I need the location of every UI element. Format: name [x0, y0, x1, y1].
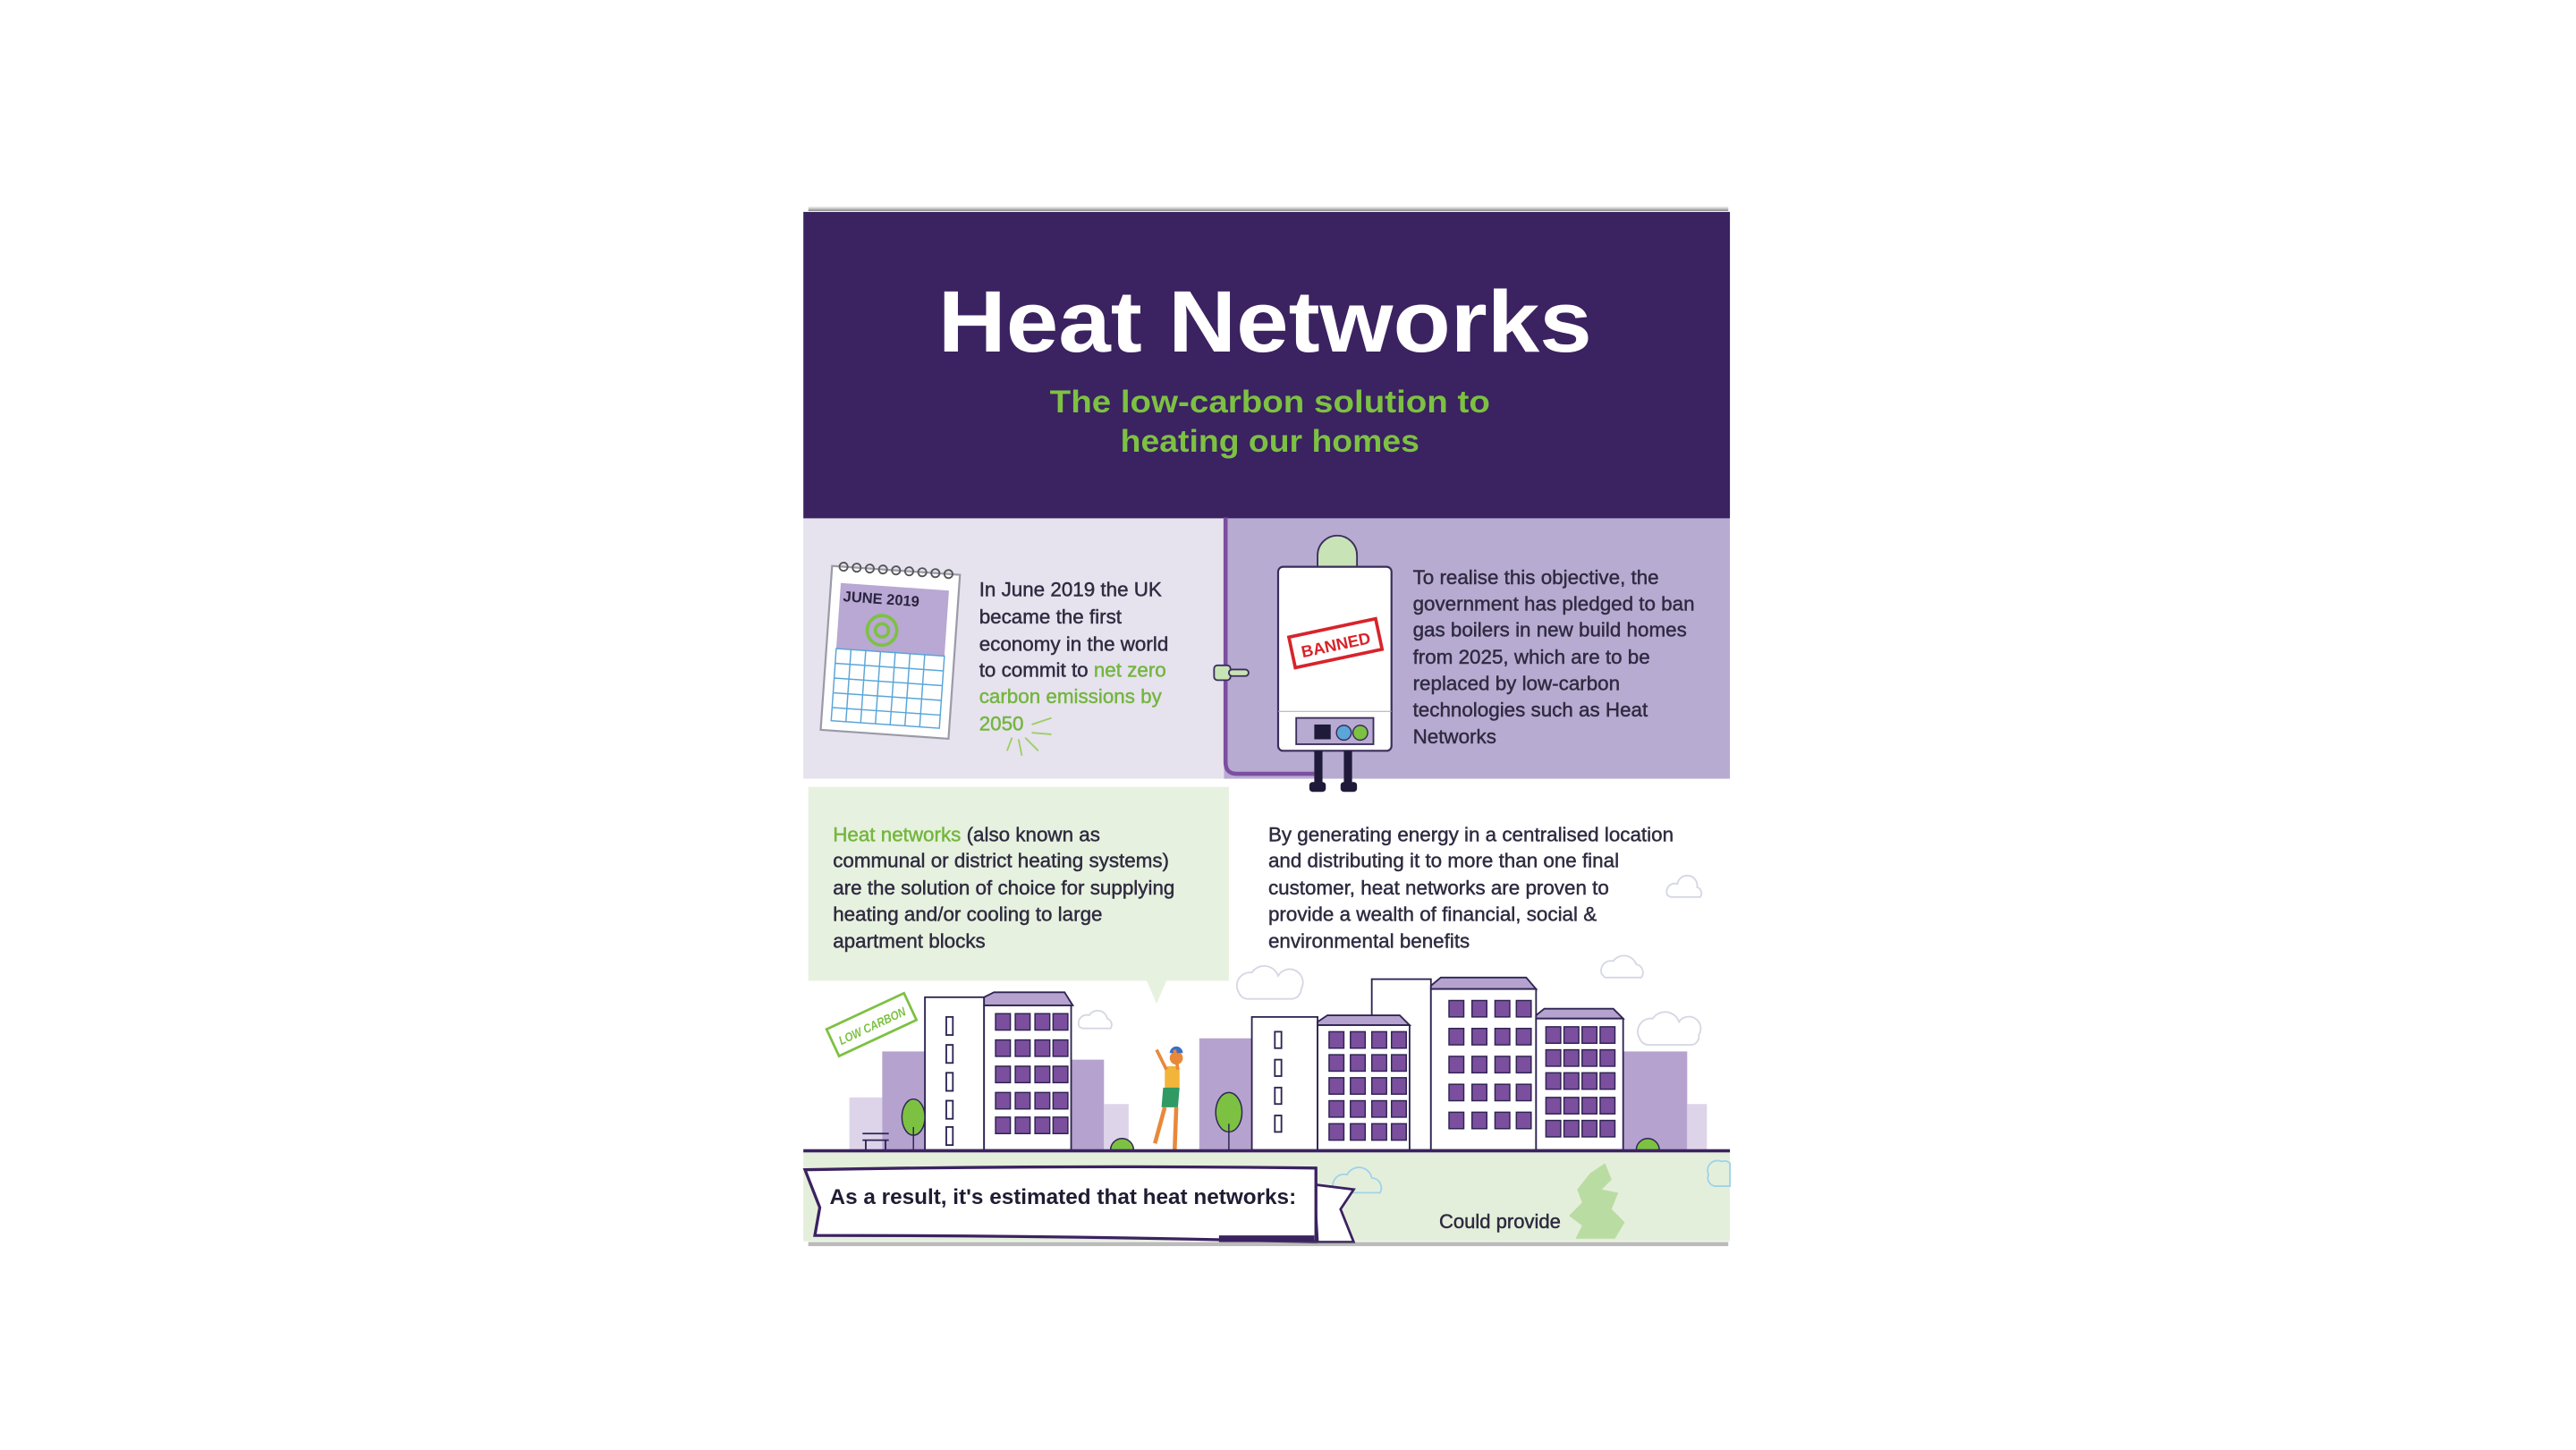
text: net zero: to commit to net zero: [979, 659, 1166, 682]
speech box: heat networks: heating and/or cooling to large: [833, 903, 1102, 925]
ground line: [803, 1149, 1730, 1152]
stamp: low carbon: [826, 993, 917, 1056]
text: boiler ban: government has pledged to ban: [1413, 592, 1695, 615]
subtitle: The low-carbon solution to: [1050, 385, 1490, 420]
text: net zero: 2050: [979, 712, 1024, 734]
banner: As a result, it's estimated that heat networks:: [830, 1185, 1296, 1209]
building: right group: [1252, 978, 1623, 1150]
text: net zero: carbon emissions by: [979, 685, 1163, 708]
panel: net zero commitment: [803, 518, 1224, 779]
icon: boiler: [1278, 536, 1392, 792]
bench: [862, 1133, 889, 1150]
text: boiler ban: [1413, 566, 1695, 748]
pipe: [1225, 518, 1314, 774]
icon: plug: [1214, 666, 1249, 680]
icon: calendar: [821, 562, 961, 739]
speech box: heat networks: communal or district heating systems): [833, 850, 1169, 872]
banner: [805, 1166, 1353, 1242]
icon: UK map: [1569, 1163, 1625, 1239]
text: boiler ban: To realise this objective, the: [1413, 566, 1659, 589]
city illustration: [826, 876, 1707, 1150]
icon: person: [1155, 1047, 1182, 1150]
panel: boiler ban: [1214, 518, 1730, 792]
text: boiler ban: replaced by low-carbon: [1413, 672, 1620, 694]
clouds: [1079, 876, 1701, 1045]
text: benefits: By generating energy in a centralised location: [1268, 823, 1674, 845]
stamp: low carbon: LOW CARBON: [836, 1005, 909, 1047]
title: Heat Networks: [938, 273, 1592, 370]
speech box: heat networks: apartment blocks: [833, 930, 986, 953]
subtitle: heating our homes: [1121, 424, 1419, 459]
text: benefits: and distributing it to more than one final: [1268, 850, 1619, 872]
text: boiler ban: gas boilers in new build homes: [1413, 619, 1687, 641]
text: benefits: customer, heat networks are proven to: [1268, 877, 1609, 899]
icon: calendar: JUNE 2019: [843, 588, 920, 610]
top shadow: [809, 206, 1728, 211]
text: benefits: provide a wealth of financial, social &: [1268, 903, 1597, 925]
subtitle: [1050, 385, 1490, 459]
icon: trees: [902, 1092, 1659, 1150]
speech box: heat networks: [809, 787, 1229, 1004]
text: boiler ban: technologies such as Heat: [1413, 699, 1648, 721]
text: net zero: became the first: [979, 606, 1123, 628]
text: benefits: environmental benefits: [1268, 930, 1470, 953]
bottom shadow: [809, 1242, 1728, 1246]
header panel: [803, 212, 1730, 518]
bottom strip: [803, 1152, 1730, 1242]
stamp: banned: BANNED: [1300, 628, 1372, 661]
speech box: heat networks: Heat networks (also known as: [833, 823, 1100, 845]
speech box: heat networks: are the solution of choice for supplying: [833, 877, 1174, 899]
text: benefits: [1268, 823, 1674, 953]
stamp: banned: [1289, 619, 1382, 667]
text: could provide: Could provide: [1439, 1210, 1561, 1233]
text: net zero: In June 2019 the UK: [979, 579, 1162, 601]
text: boiler ban: from 2025, which are to be: [1413, 646, 1650, 668]
background buildings: [850, 1039, 1707, 1150]
text: net zero: [979, 579, 1168, 756]
building: left: [925, 992, 1072, 1150]
text: net zero: economy in the world: [979, 632, 1168, 655]
text: boiler ban: Networks: [1413, 725, 1496, 748]
